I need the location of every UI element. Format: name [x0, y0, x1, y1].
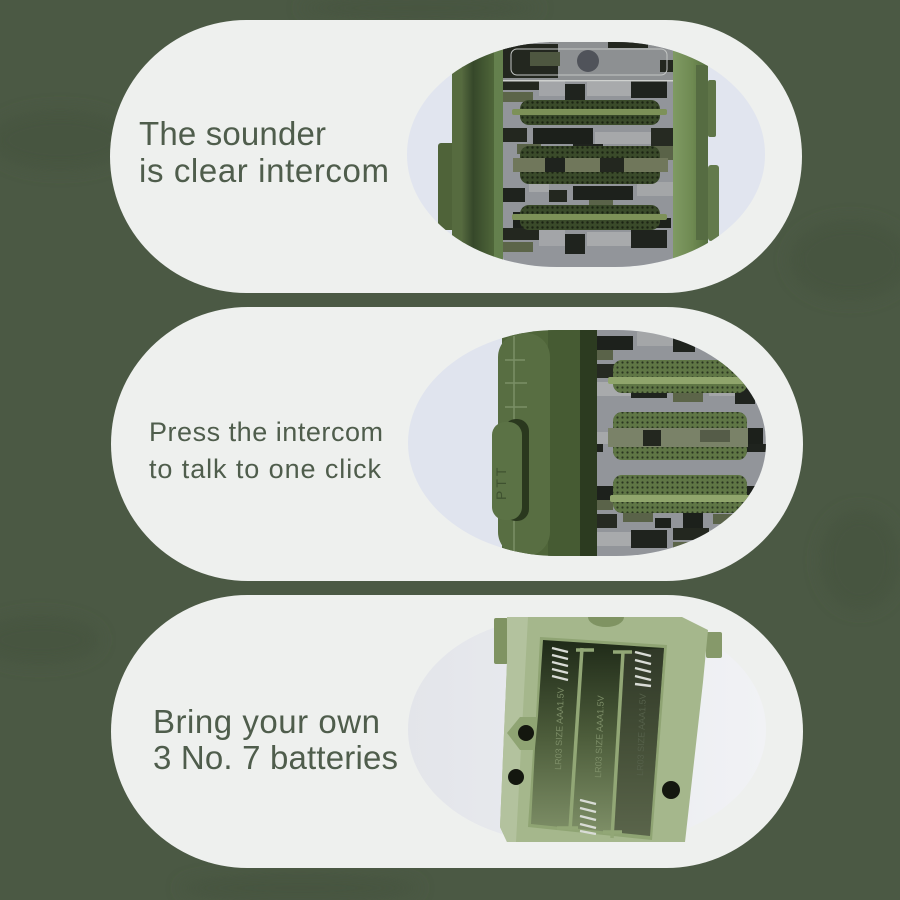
heading: Bring your own 3 No. 7 batteries: Bring your own — [153, 703, 380, 740]
panel: push to talk — [111, 307, 803, 581]
speaker slot 3 — [512, 205, 667, 230]
radio back shell — [500, 617, 708, 842]
top knob — [588, 617, 624, 627]
speaker slot 3 — [610, 475, 760, 513]
panel: batteries — [111, 595, 803, 868]
speaker slot 1 — [512, 100, 667, 125]
top camera section — [503, 42, 673, 80]
springs — [552, 648, 651, 834]
heading: Press the intercom to talk to one click: Press the intercom — [149, 417, 383, 447]
right body strip — [673, 42, 708, 267]
dividers — [557, 648, 632, 838]
battery size markings: LR03 SIZE AAA1.5V — [635, 693, 648, 776]
panel 2 background pill — [111, 307, 803, 581]
PTT button — [492, 419, 529, 521]
left top button — [494, 618, 508, 664]
screw 2 — [508, 769, 524, 785]
battery size markings: LR03 SIZE AAA1.5V — [553, 687, 566, 770]
photo: PTT button on radio side — [408, 330, 767, 556]
battery compartment — [507, 637, 667, 840]
radio side body — [502, 330, 556, 556]
speaker slot 2 — [513, 146, 668, 184]
heading: Press the intercom to talk to one click: to talk to one click — [149, 454, 382, 484]
speaker slot 1 — [608, 360, 758, 393]
heading: Bring your own 3 No. 7 batteries: 3 No. 7 batteries — [153, 739, 398, 776]
right top button — [706, 632, 722, 658]
side markings — [505, 336, 527, 556]
PTT button: PTT — [493, 465, 509, 500]
photo: speaker grille of the radio — [407, 42, 765, 267]
camouflage speaker face — [503, 42, 673, 267]
camouflage face — [597, 330, 767, 556]
screw 3 — [662, 781, 680, 799]
speaker slot 2 — [608, 412, 748, 460]
panel: sounder — [110, 20, 802, 293]
battery size markings — [553, 687, 648, 778]
heading: The sounder is clear intercom: is clear intercom — [139, 152, 389, 189]
left side button — [438, 143, 452, 230]
photo: battery compartment — [408, 617, 766, 842]
panel 1 background pill — [110, 20, 802, 293]
screw 1 — [518, 725, 534, 741]
panel 3 background pill — [111, 595, 803, 868]
battery size markings: LR03 SIZE AAA1.5V — [593, 695, 606, 778]
dark right battery bay — [612, 648, 664, 836]
heading: The sounder is clear intercom: The sounder — [139, 115, 326, 152]
right ribbed button — [708, 165, 719, 241]
right upper button — [708, 80, 716, 137]
